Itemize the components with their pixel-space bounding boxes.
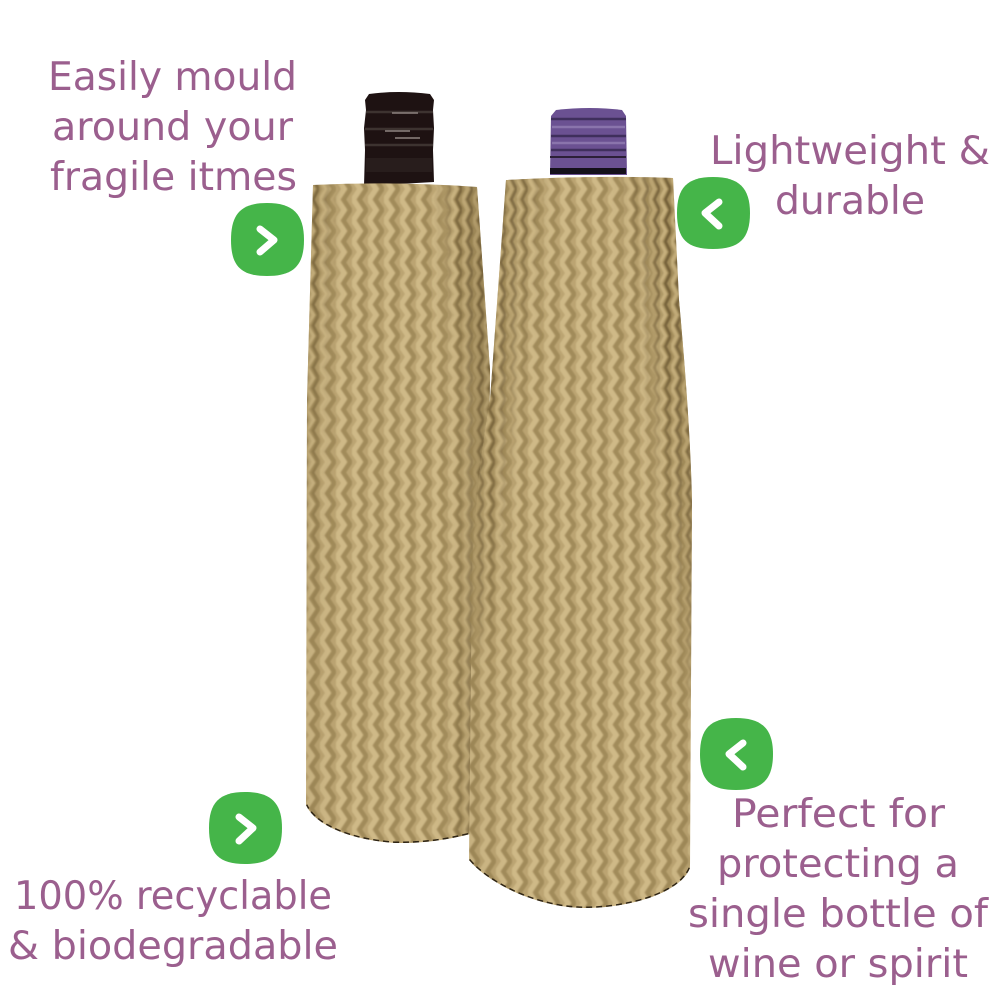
heading: mould text: fragile itmes xyxy=(50,155,297,200)
heading: lightweight text xyxy=(710,129,990,224)
heading: recyclable text: 100% recyclable xyxy=(14,874,332,919)
callout: lightweight and durable xyxy=(677,129,990,249)
icon: dark bottle cap xyxy=(364,92,434,186)
heading: recyclable text xyxy=(8,874,338,969)
heading: perfect for text: wine or spirit xyxy=(708,942,968,987)
heading: lightweight text: durable xyxy=(775,179,925,224)
icon: left chevron button xyxy=(700,718,773,790)
heading: lightweight text: Lightweight & xyxy=(710,129,990,174)
icon: right chevron button xyxy=(231,203,304,276)
heading: perfect for text xyxy=(688,792,989,987)
icon: right chevron button xyxy=(209,792,282,864)
corrugated sleeve left xyxy=(300,180,495,850)
callout: recyclable and biodegradable xyxy=(8,792,338,969)
bottle: right sleeve with purple cap xyxy=(465,108,695,915)
callout: perfect for protecting a bottle xyxy=(688,718,989,987)
heading: recyclable text: & biodegradable xyxy=(8,924,338,969)
icon: left chevron button xyxy=(677,177,750,249)
corrugated sleeve right xyxy=(465,170,695,915)
callout: mould around fragile items xyxy=(48,55,304,276)
bottle: left sleeve with dark cap xyxy=(300,92,495,850)
heading: mould text xyxy=(48,55,297,200)
heading: mould text: Easily mould xyxy=(48,55,297,100)
heading: mould text: around your xyxy=(52,105,294,150)
heading: perfect for text: Perfect for xyxy=(732,792,946,837)
heading: perfect for text: protecting a xyxy=(717,842,959,887)
icon: purple bottle cap xyxy=(550,108,627,175)
heading: perfect for text: single bottle of xyxy=(688,892,989,937)
